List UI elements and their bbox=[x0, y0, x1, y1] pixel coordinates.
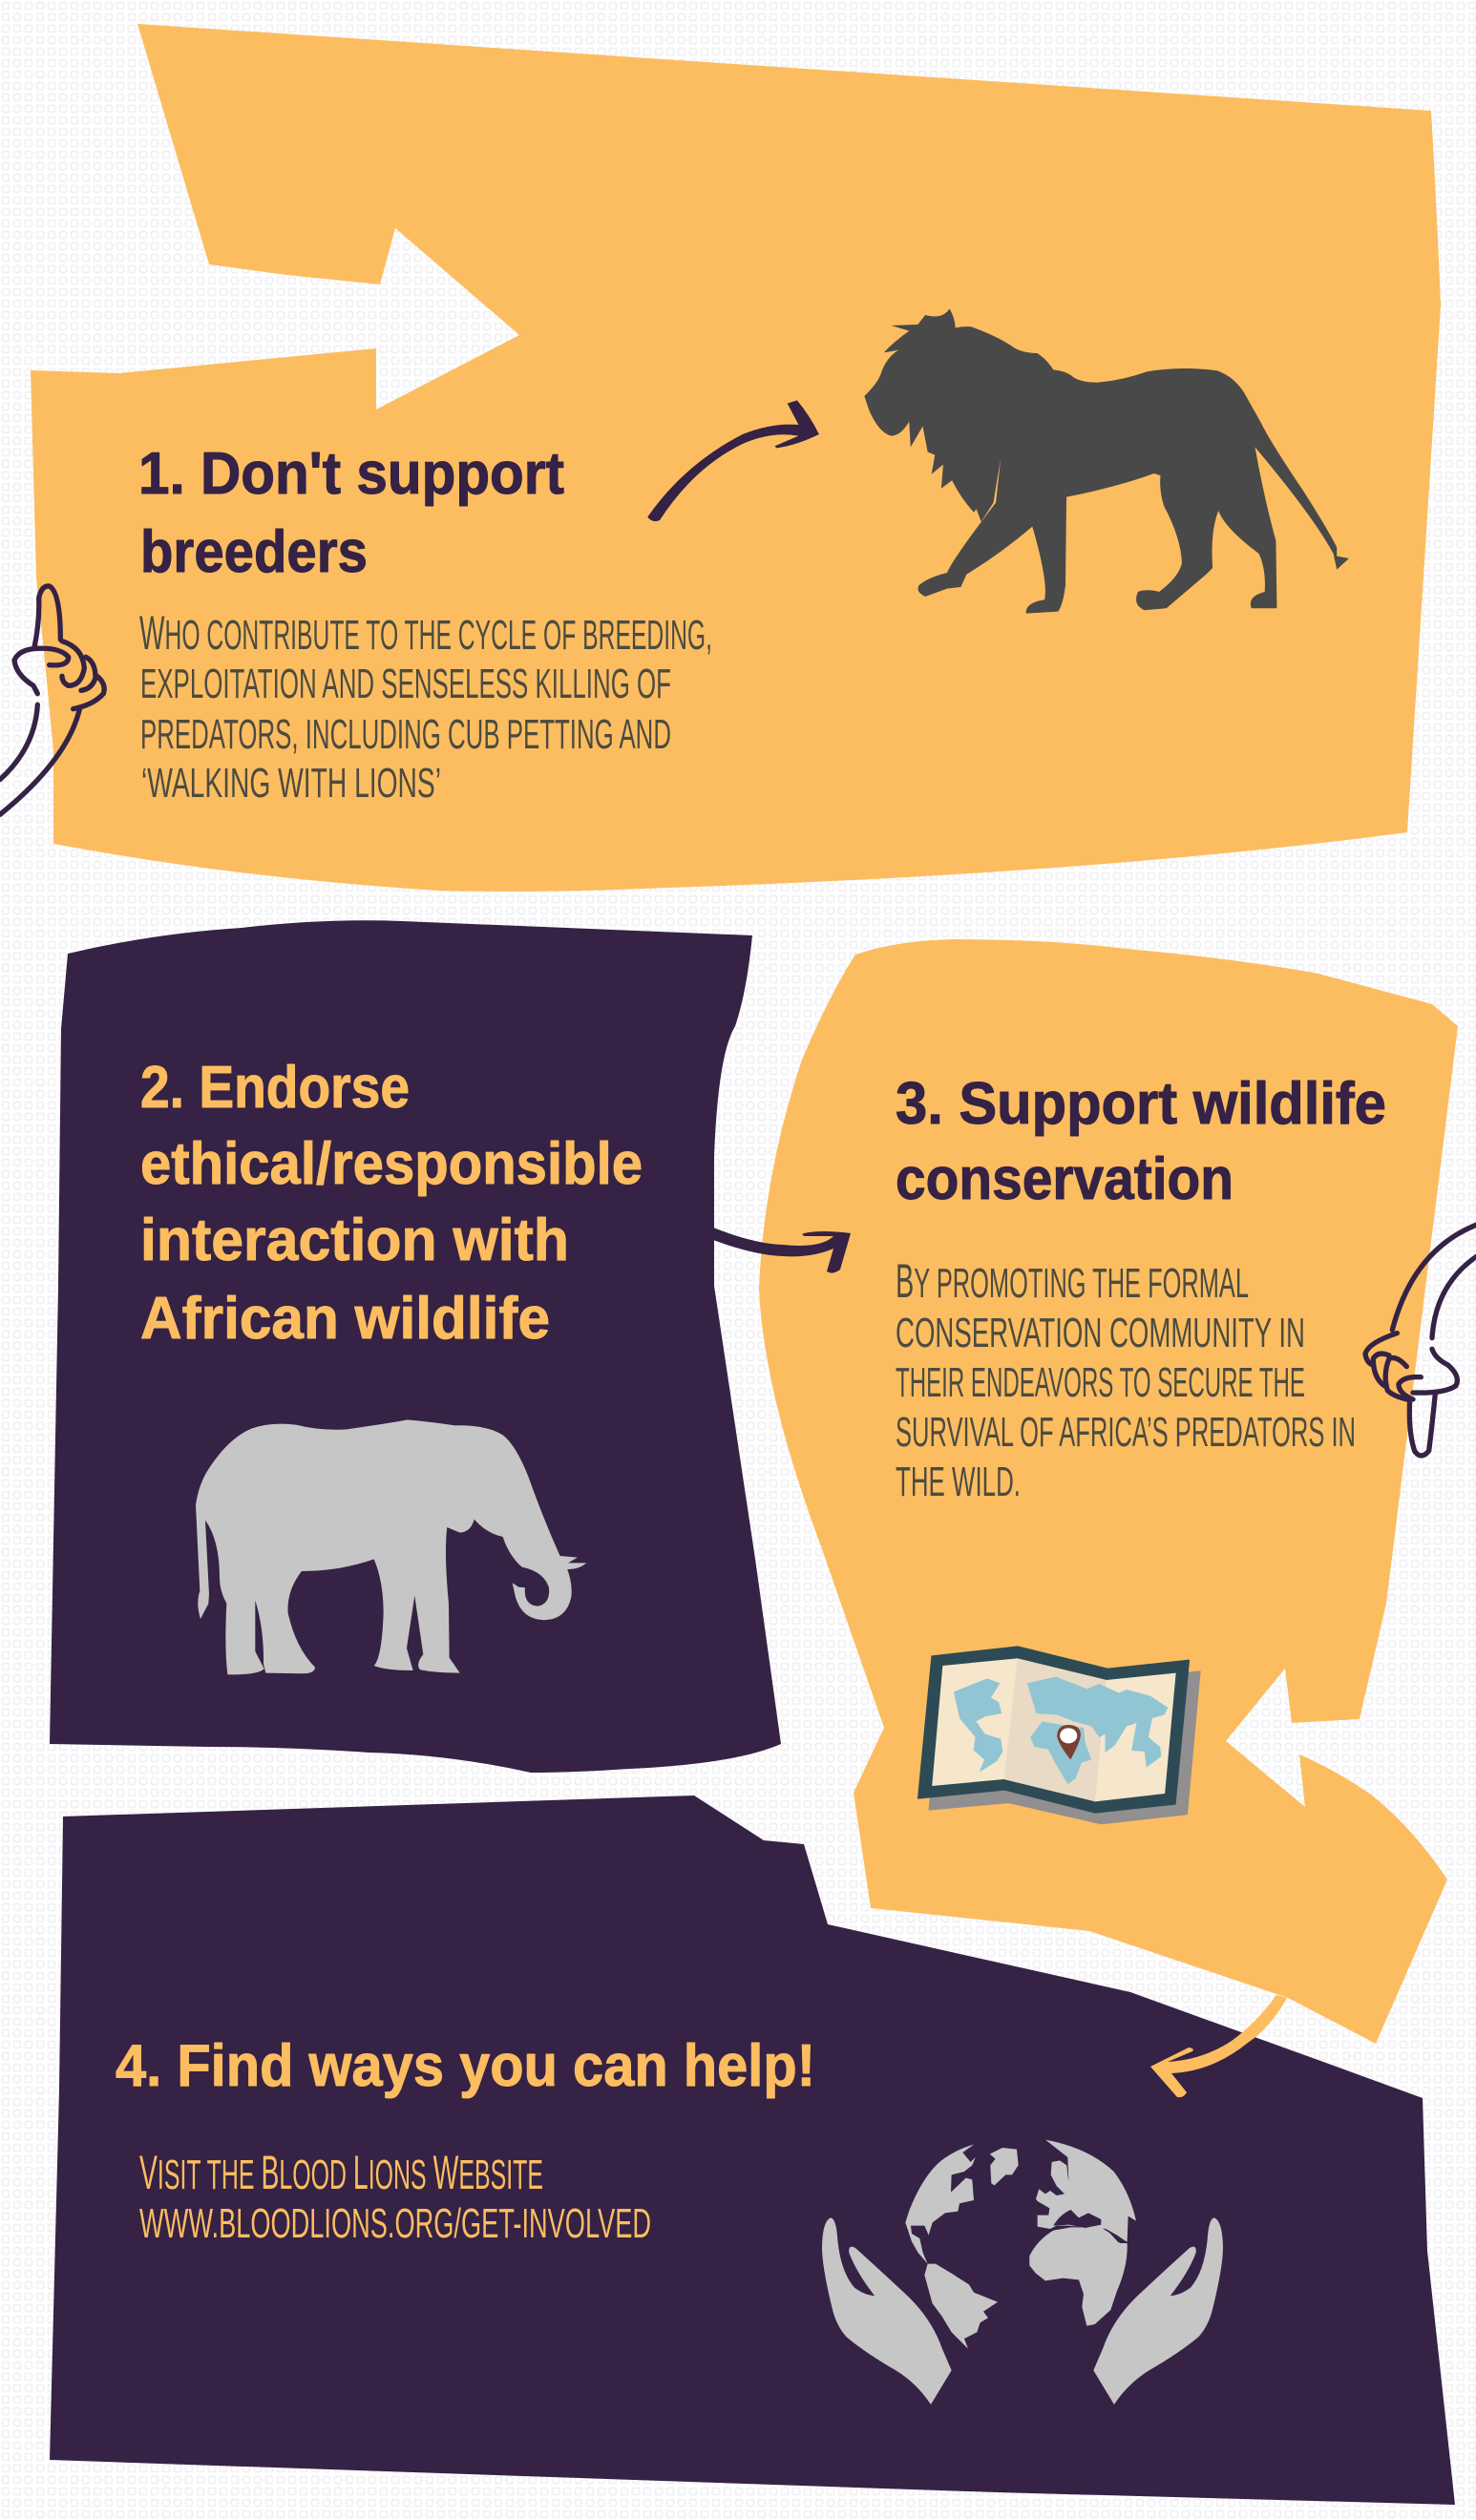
text: step 4 body: WWW.BLOODLIONS.ORG/GET-INVOLVED bbox=[139, 2200, 651, 2247]
text: step 1 body: WHO CONTRIBUTE TO THE CYCLE OF BREEDING, bbox=[139, 606, 712, 660]
text: step 4 body bbox=[139, 2146, 651, 2247]
heading: step 3: 3. Support wildlife bbox=[896, 1071, 1386, 1137]
heading: step 3: conservation bbox=[896, 1146, 1234, 1212]
heading: step 1: breeders bbox=[140, 519, 368, 585]
heading: step 2: 2. Endorse bbox=[140, 1055, 410, 1121]
panel: 4 find ways you can help bbox=[50, 1796, 1455, 2505]
heading: step 2: African wildlife bbox=[140, 1286, 550, 1352]
icon: pointing hand left, finger up bbox=[0, 586, 104, 814]
text: step 1 body bbox=[139, 606, 712, 807]
arrow: to lion bbox=[647, 400, 819, 521]
text: step 3 body: THE WILD. bbox=[896, 1459, 1021, 1505]
panel: 3 support wildlife conservation bbox=[759, 939, 1458, 2044]
heading: step 2 bbox=[140, 1055, 643, 1352]
panel: 1 don't support breeders bbox=[31, 24, 1441, 892]
arrow: panel 3 to panel 4 bbox=[1150, 1995, 1287, 2097]
icon: lion silhouette bbox=[864, 308, 1349, 614]
text: step 1 body: ‘WALKING WITH LIONS’ bbox=[141, 760, 441, 807]
heading: step 2: interaction with bbox=[140, 1208, 569, 1273]
text: step 4 body: VISIT THE BLOOD LIONS WEBSITE bbox=[139, 2146, 543, 2199]
text: step 3 body bbox=[896, 1254, 1356, 1505]
heading: step 1 bbox=[138, 441, 564, 585]
text: step 1 body: PREDATORS, INCLUDING CUB PETTING AND bbox=[140, 711, 671, 758]
text: step 1 body: EXPLOITATION AND SENSELESS KILLING OF bbox=[140, 661, 671, 707]
heading: step 4: 4. Find ways you can help! bbox=[116, 2033, 815, 2099]
heading: step 1: 1. Don't support bbox=[138, 441, 564, 507]
icon: pointing hand right, finger down bbox=[1365, 1225, 1476, 1456]
arrow: panel 2 to panel 3 bbox=[713, 1228, 851, 1273]
icon: hands holding globe bbox=[822, 2140, 1223, 2404]
panel: 2 endorse ethical interaction bbox=[50, 920, 781, 1773]
heading: step 3 bbox=[896, 1071, 1386, 1212]
heading: step 2: ethical/responsible bbox=[140, 1131, 643, 1197]
icon: folded world map with pin bbox=[918, 1647, 1200, 1824]
text: step 3 body: BY PROMOTING THE FORMAL bbox=[896, 1254, 1249, 1308]
icon: elephant silhouette bbox=[196, 1419, 586, 1674]
